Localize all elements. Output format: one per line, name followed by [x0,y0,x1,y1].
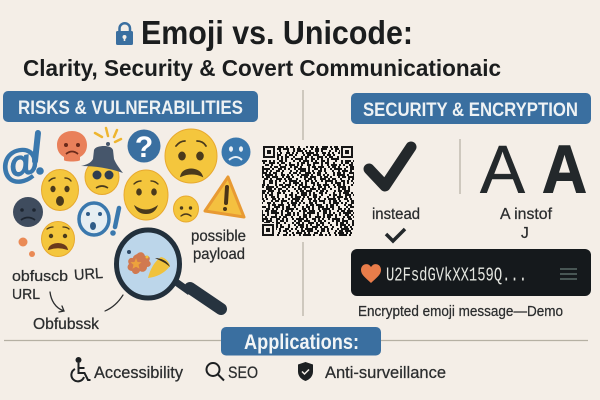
caption: encrypted emoji message: Encrypted emoji message—Demo [358,303,563,320]
icon: smiling worried face [124,170,168,220]
icon: magnifying glass [116,230,221,309]
arrow: url to obfubssk [50,292,64,312]
application: accessibility: Accessibility [94,363,183,382]
icon: question mark circle [128,130,160,164]
label: possible payload [191,228,246,263]
icon: thin letter A: A [480,132,526,208]
icon: warning triangle [205,177,244,217]
label: obfuscated url: URL [73,265,104,284]
icon: blue sad face [222,138,250,166]
label: possible payload: payload [193,246,245,263]
icon: sparks [95,128,121,142]
label: instead: instead [372,206,420,223]
icon: red worried face [57,131,87,162]
panel heading: security and encryption: SECURITY & ENCRYPTION [363,100,578,121]
label: obfuscated url: URL [12,286,40,303]
title: Emoji vs. Unicode: [141,14,413,51]
icon: large check mark [369,147,411,186]
icon: bold letter A: A [542,132,587,208]
icon: blue ring face with exclamation [79,203,119,236]
label: obfubssk: Obfubssk [33,316,100,333]
label: possible payload: possible [191,228,246,245]
icon: big worried face [165,129,217,183]
icon: menu lines [560,269,577,279]
icon: small check mark [386,229,405,241]
panel heading: security and encryption [351,93,591,124]
label: a instof j [500,206,553,242]
icon: dark sad face [13,197,43,227]
ciphertext: U2FsdGVkXX159Q... [386,264,527,286]
qr code [261,145,354,237]
subtitle: Clarity, Security & Covert Communicationaic [23,55,501,81]
application: anti-surveillance: Anti-surveillance [325,363,446,382]
heading: applications [221,327,381,356]
icon: spy face with hat [81,142,123,194]
icon: padlock [116,23,133,45]
icon: surprised face [42,170,78,210]
application: seo: SEO [228,363,258,382]
application: seo [206,363,258,382]
application: accessibility [71,358,183,382]
heading: applications: Applications: [244,331,359,354]
icon: wheelchair [71,358,90,381]
icon: frowning face [42,222,74,256]
icon: search [206,363,224,380]
label: a instof j: J [521,225,529,242]
label: obfuscated url [12,265,104,303]
label: a instof j: A instof [500,206,553,223]
arrow: magnifier connector [105,295,123,311]
panel: risk emoji cluster [0,128,251,257]
icon: shield [298,362,313,381]
icon: orange dots [18,238,35,257]
icon: question mark circle: ? [135,131,153,164]
label: obfuscated url: obfuscb [12,268,68,285]
icon: small worried face [174,196,198,222]
panel: encrypted message bar [351,249,591,296]
panel heading: risks and vulnerabilities [3,91,258,122]
panel heading: risks and vulnerabilities: RISKS & VULNERABILITIES [18,98,243,119]
icon: orange heart [361,264,381,283]
